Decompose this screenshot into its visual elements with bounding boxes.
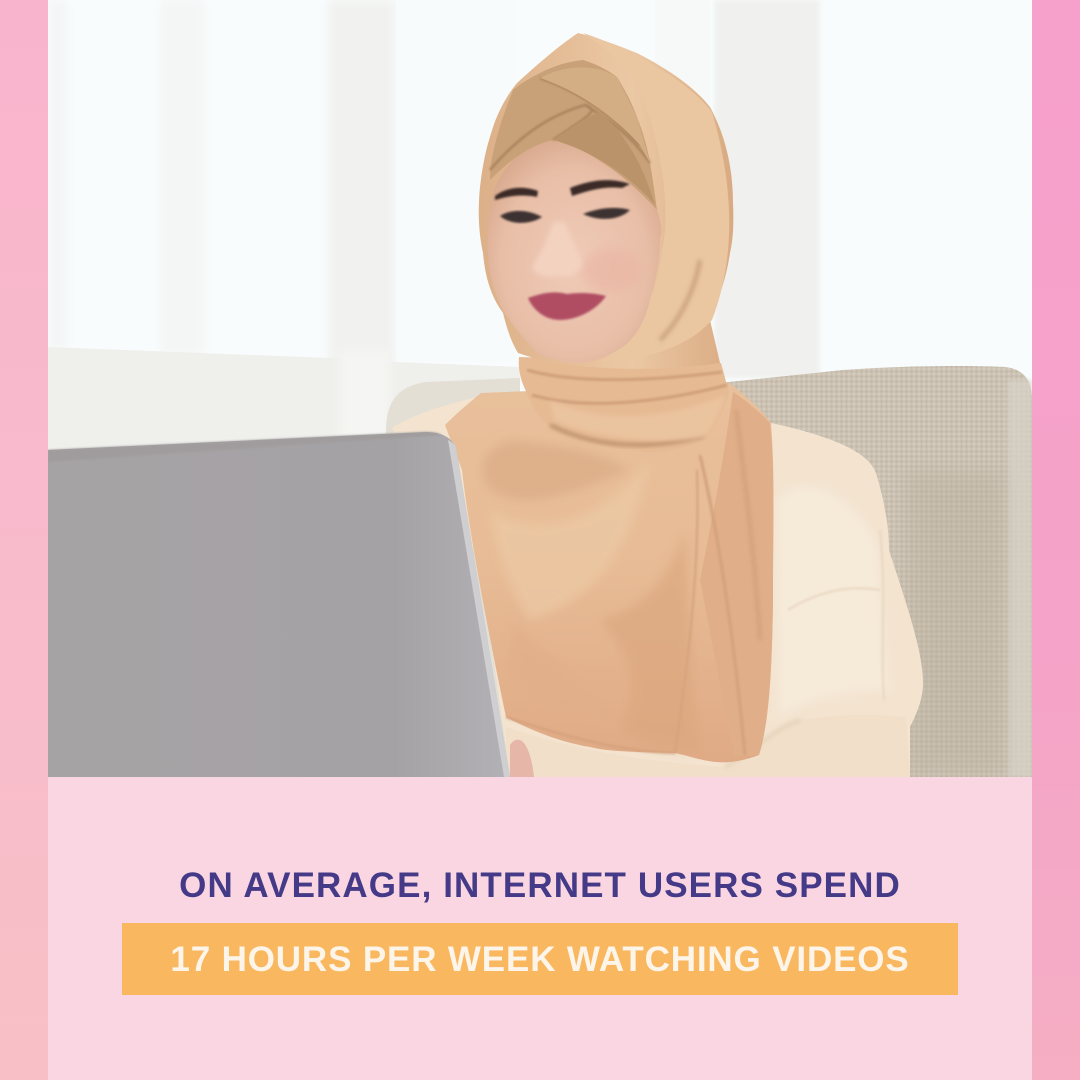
bottom text panel (48, 777, 1032, 1080)
hand (510, 740, 534, 777)
hijab hood (479, 33, 733, 369)
armchair (386, 366, 1032, 777)
face (488, 140, 661, 363)
sweater (392, 392, 923, 777)
heading line: ON AVERAGE, INTERNET USERS SPEND (179, 866, 901, 905)
curtain background (48, 0, 1032, 777)
hijab lower drape (445, 383, 774, 762)
highlight banner: 17 HOURS PER WEEK WATCHING VIDEOS (170, 940, 910, 979)
photo: woman in hijab using a laptop (48, 0, 1032, 777)
head band (490, 60, 657, 210)
scarf knot at the neck (519, 357, 729, 453)
laptop (48, 432, 510, 777)
highlight banner (122, 923, 958, 995)
